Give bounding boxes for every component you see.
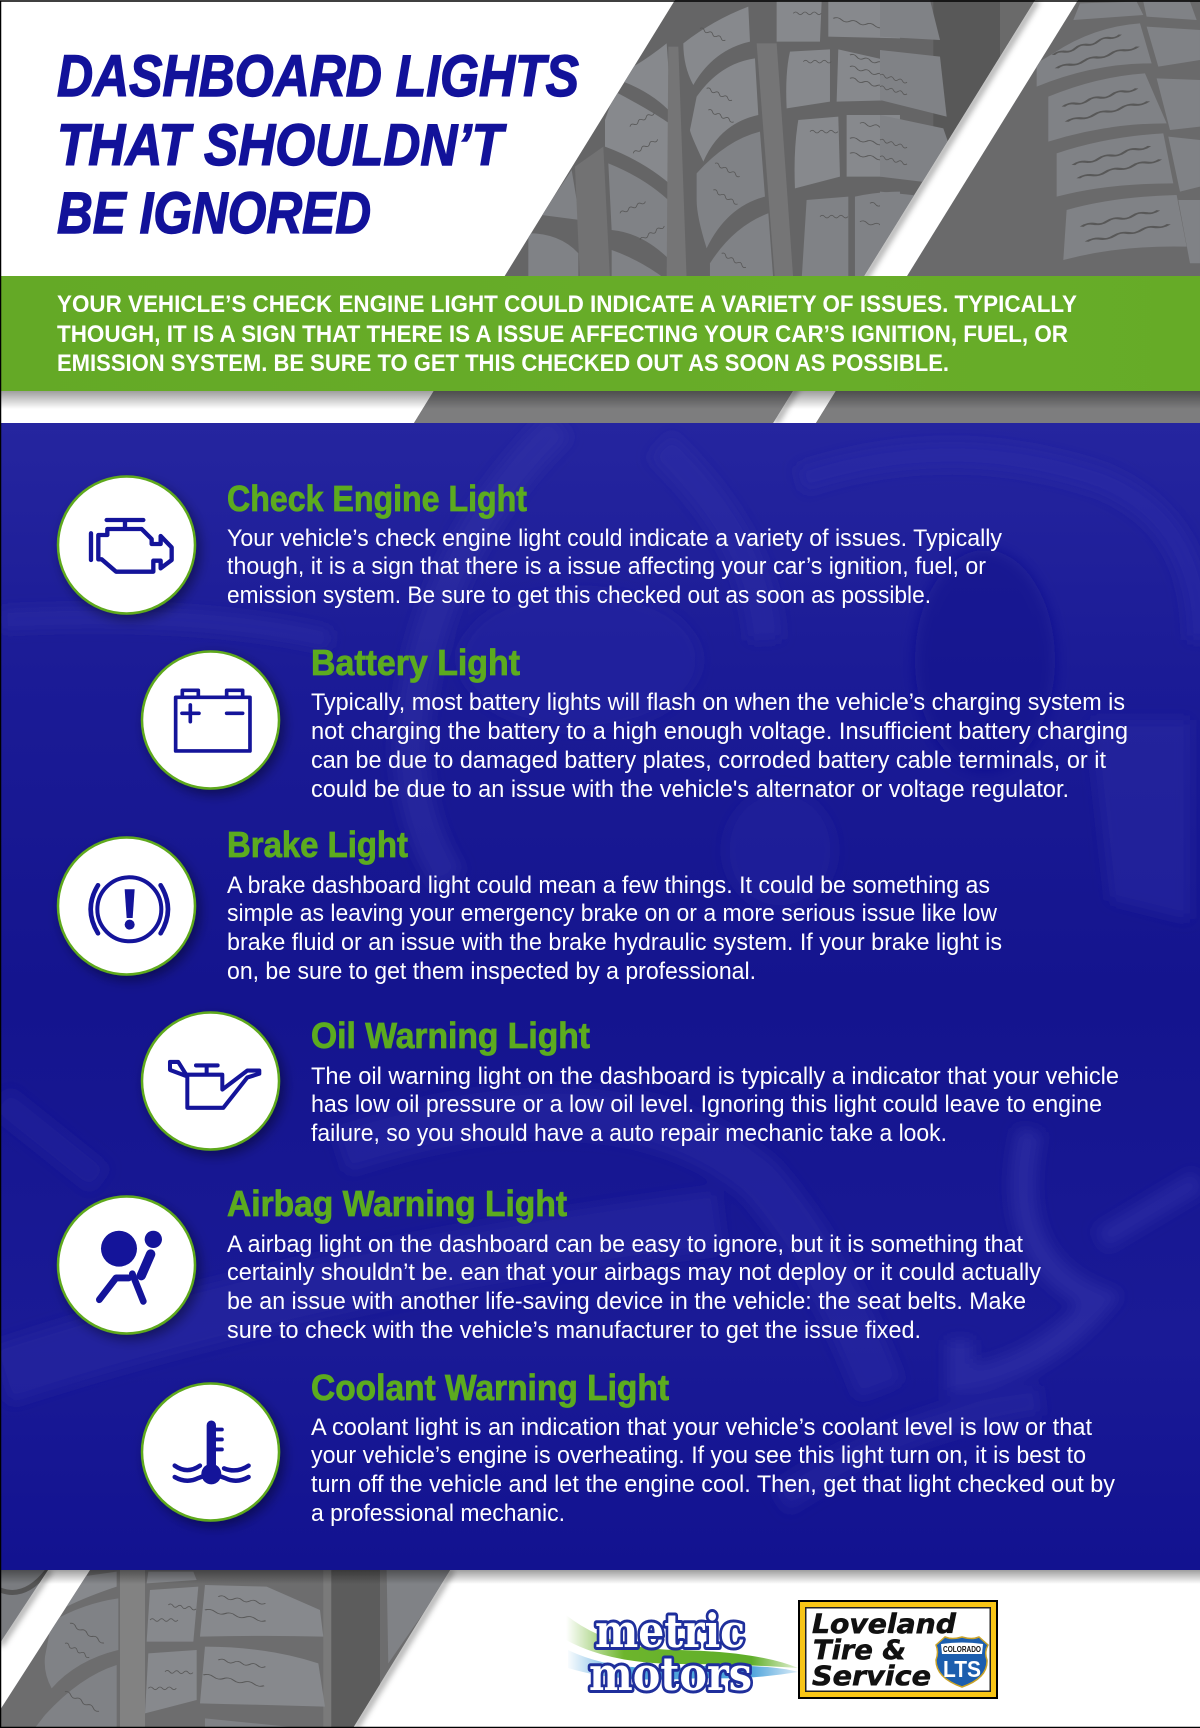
logo: loveland tire and service: Service	[812, 1661, 931, 1692]
text block	[311, 1063, 1119, 1147]
item: brake light	[58, 824, 1002, 985]
text block: sure to check with the vehicle’s manufacturer to get the issue fixed.	[227, 1317, 921, 1344]
logo: loveland tire and service: COLORADO	[943, 1645, 981, 1654]
heading: Brake Light	[227, 824, 408, 865]
logo: loveland tire and service: Loveland	[812, 1609, 957, 1640]
icon: engine	[58, 476, 195, 614]
title	[57, 44, 579, 246]
logo: metric motors: metric	[595, 1604, 745, 1658]
logo: metric motors	[566, 1604, 798, 1701]
text block: not charging the battery to a high enough voltage. Insufficient battery charging	[311, 718, 1128, 745]
logo: loveland tire and service: Tire &	[813, 1635, 906, 1666]
text block	[227, 1231, 1041, 1344]
logo: loveland tire and service: LTS	[943, 1656, 981, 1682]
text block	[227, 525, 1002, 609]
logo: loveland tire and service	[798, 1600, 998, 1699]
text block: your vehicle’s engine is overheating. If you see this light turn on, it is best to	[311, 1442, 1086, 1469]
icon: airbag	[58, 1196, 195, 1334]
icon: oil can	[142, 1012, 279, 1150]
text block	[227, 872, 1002, 985]
text block: has low oil pressure or a low oil level. Ignoring this light could leave to engine	[311, 1091, 1102, 1118]
title: THAT SHOULDN’T	[57, 113, 507, 178]
heading: Coolant Warning Light	[311, 1367, 669, 1408]
text block	[311, 689, 1128, 803]
text block: A coolant light is an indication that your vehicle’s coolant level is low or that	[311, 1414, 1092, 1441]
text block: though, it is a sign that there is a issue affecting your car’s ignition, fuel, or	[227, 553, 986, 580]
title: BE IGNORED	[57, 181, 371, 246]
item: check engine light	[58, 476, 1002, 614]
item: battery light	[142, 642, 1128, 803]
icon: brake warning	[58, 838, 195, 974]
text block: on, be sure to get them inspected by a professional.	[227, 958, 756, 985]
green banner: YOUR VEHICLE’S CHECK ENGINE LIGHT COULD INDICATE A VARIETY OF ISSUES. TYPICALLY	[57, 291, 1077, 318]
heading: Oil Warning Light	[311, 1015, 590, 1056]
text block: brake fluid or an issue with the brake hydraulic system. If your brake light is	[227, 929, 1002, 956]
tire photo: top right panel	[800, 0, 1200, 423]
text block: failure, so you should have a auto repair mechanic take a look.	[311, 1120, 947, 1147]
text block: could be due to an issue with the vehicle's alternator or voltage regulator.	[311, 776, 1069, 803]
tire photo: bottom left panel	[0, 1570, 460, 1728]
text block: A brake dashboard light could mean a few things. It could be something as	[227, 872, 990, 899]
green banner: EMISSION SYSTEM. BE SURE TO GET THIS CHECKED OUT AS SOON AS POSSIBLE.	[57, 350, 949, 377]
heading: Airbag Warning Light	[227, 1183, 567, 1224]
text block: be an issue with another life-saving device in the vehicle: the seat belts. Make	[227, 1288, 1026, 1315]
icon: battery	[142, 652, 279, 788]
text block: certainly shouldn’t be. ean that your airbags may not deploy or it could actually	[227, 1259, 1041, 1286]
title: DASHBOARD LIGHTS	[57, 44, 579, 109]
green banner: THOUGH, IT IS A SIGN THAT THERE IS A ISSUE AFFECTING YOUR CAR’S IGNITION, FUEL, OR	[57, 321, 1068, 348]
item: coolant warning light	[142, 1367, 1115, 1527]
tire photo: top left panel	[400, 0, 1050, 423]
heading: Battery Light	[311, 642, 520, 683]
text block: Typically, most battery lights will flash on when the vehicle’s charging system is	[311, 689, 1125, 716]
blue dashboard panel background	[0, 423, 1200, 1570]
heading: Check Engine Light	[227, 478, 527, 519]
text block: emission system. Be sure to get this checked out as soon as possible.	[227, 582, 931, 609]
logo: metric motors: motors	[589, 1647, 752, 1701]
text block: Your vehicle’s check engine light could indicate a variety of issues. Typically	[227, 525, 1002, 552]
text block	[311, 1414, 1115, 1527]
text block: can be due to damaged battery plates, corroded battery cable terminals, or it	[311, 747, 1106, 774]
text block: The oil warning light on the dashboard is typically a indicator that your vehicle	[311, 1063, 1119, 1090]
green banner	[0, 276, 1200, 391]
icon: coolant thermometer	[142, 1384, 279, 1520]
text block: a professional mechanic.	[311, 1500, 565, 1527]
shadow under blue panel	[0, 1570, 1200, 1584]
item: oil warning light	[142, 1012, 1119, 1150]
text block: A airbag light on the dashboard can be easy to ignore, but it is something that	[227, 1231, 1023, 1258]
item: airbag warning light	[58, 1183, 1041, 1344]
shadow under green banner	[0, 391, 1200, 409]
text block: simple as leaving your emergency brake on or a more serious issue like low	[227, 900, 998, 927]
text block: turn off the vehicle and let the engine cool. Then, get that light checked out by	[311, 1471, 1115, 1498]
